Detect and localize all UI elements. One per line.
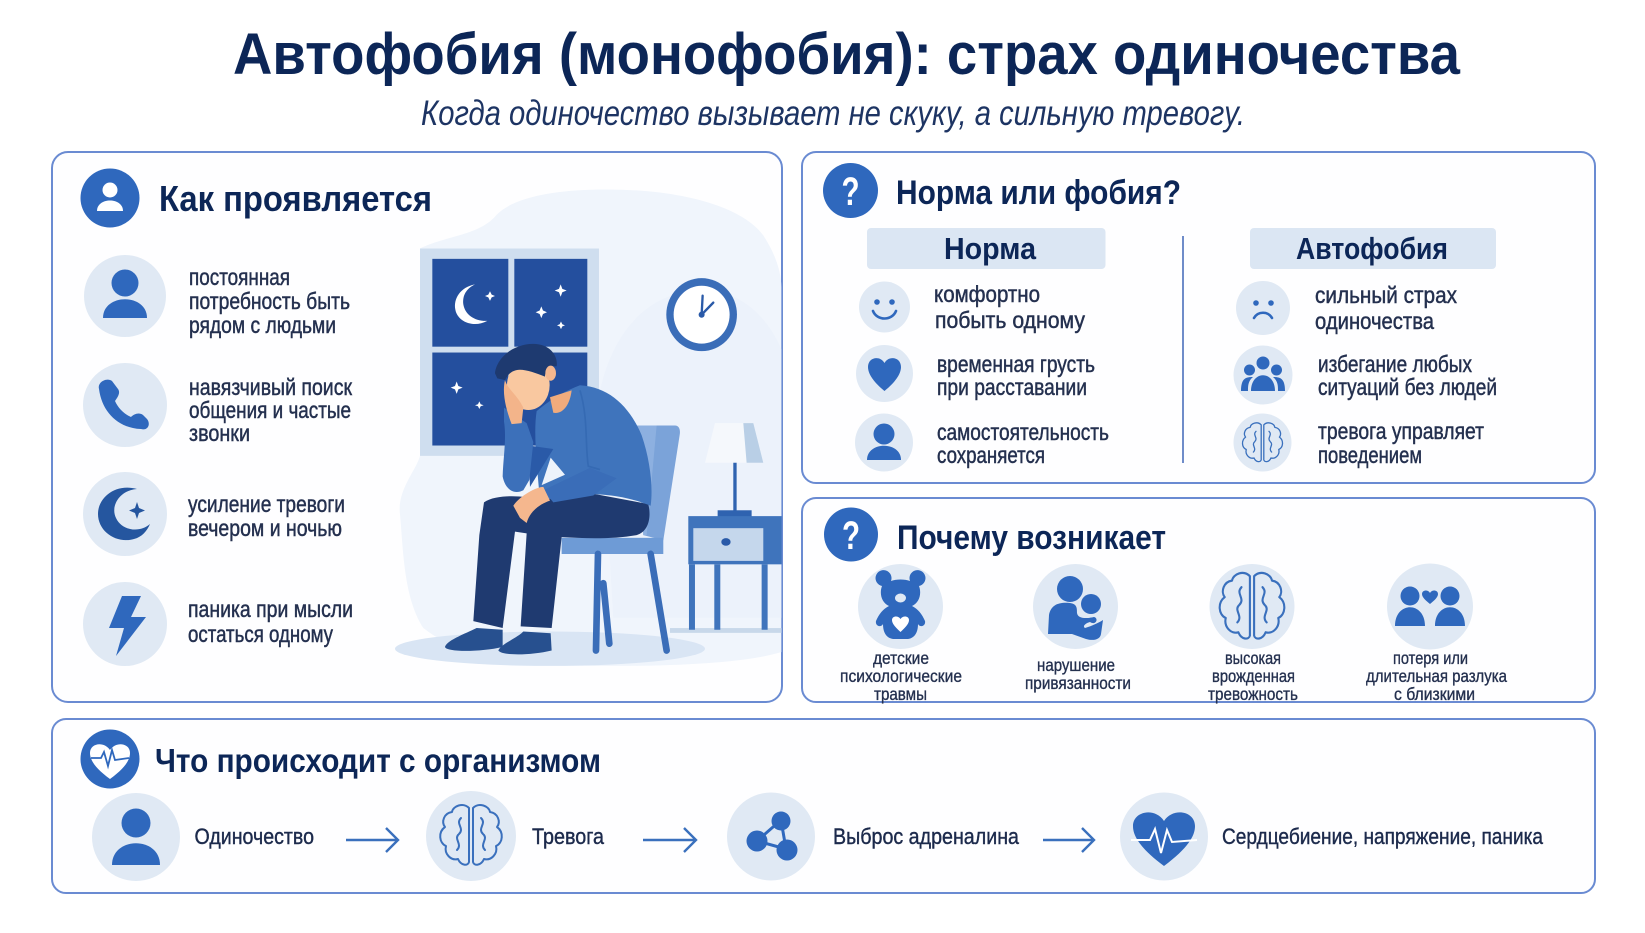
norm: independence: сохраняется <box>937 442 1045 468</box>
symptom: constant need: рядом с людьми <box>189 312 336 338</box>
cause: loss or separation <box>1366 564 1507 704</box>
icon: question: ? <box>842 170 860 214</box>
panel: norm or phobia <box>802 152 1595 483</box>
phobia: strong fear: одиночества <box>1315 308 1434 334</box>
column header: autophobia <box>1250 228 1496 269</box>
heading: why it arises: Почему возникает <box>897 519 1166 557</box>
phobia: avoidance: избегание любых <box>1318 351 1472 377</box>
panel: what happens to the body <box>52 719 1595 893</box>
cause: attachment disorder: нарушение <box>1037 655 1115 675</box>
icon: section person <box>80 168 140 228</box>
arrow <box>1043 828 1094 852</box>
cause: innate anxiety <box>1208 564 1298 704</box>
symptom: panic: остаться одному <box>188 621 333 647</box>
illustration: lonely man at night <box>395 190 782 666</box>
arrow <box>643 828 696 852</box>
step: loneliness <box>92 793 314 881</box>
step: adrenaline release <box>727 792 1019 880</box>
cause: attachment disorder <box>1025 564 1131 693</box>
phobia: strong fear: сильный страх <box>1315 282 1457 308</box>
symptom: calls: навязчивый поиск <box>189 374 353 400</box>
cause: childhood trauma <box>840 564 962 704</box>
cause: loss or separation: длительная разлука <box>1366 666 1507 686</box>
cause: innate anxiety: высокая <box>1225 648 1281 668</box>
norm: comfortable alone: побыть одному <box>935 307 1085 333</box>
cause: innate anxiety: врожденная <box>1212 666 1295 686</box>
norm: comfortable alone: комфортно <box>934 281 1040 307</box>
symptom: evening anxiety: вечером и ночью <box>188 515 342 541</box>
symptom: panic: паника при мысли <box>188 596 353 622</box>
norm: temporary sadness <box>856 345 1095 402</box>
step: loneliness: Одиночество <box>194 824 314 849</box>
cause: attachment disorder: привязанности <box>1025 673 1131 693</box>
step: palpitations, tension, panic: Сердцебиение, напряжение, паника <box>1222 824 1543 849</box>
phobia: avoidance <box>1234 346 1497 404</box>
norm: temporary sadness: при расставании <box>937 374 1087 400</box>
column header: autophobia: Автофобия <box>1296 231 1448 266</box>
column header: norm: Норма <box>944 231 1037 266</box>
step: anxiety <box>426 791 604 881</box>
step: anxiety: Тревога <box>532 824 604 849</box>
symptom: calls: общения и частые <box>189 397 351 423</box>
symptom: calls: звонки <box>189 420 250 446</box>
symptom: evening anxiety <box>83 472 345 556</box>
cause: loss or separation: с близкими <box>1394 684 1475 704</box>
symptom: panic <box>83 582 353 666</box>
cause: loss or separation: потеря или <box>1393 648 1468 668</box>
norm: independence: самостоятельность <box>937 419 1109 445</box>
symptom: constant need: постоянная <box>189 264 290 290</box>
cause: childhood trauma: травмы <box>874 684 927 704</box>
symptom: evening anxiety: усиление тревоги <box>188 491 345 517</box>
norm: temporary sadness: временная грусть <box>937 351 1095 377</box>
subtitle: Когда одиночество вызывает не скуку, а сильную тревогу. <box>421 94 1245 133</box>
icon: question <box>824 508 878 562</box>
step: palpitations, tension, panic <box>1120 792 1543 880</box>
step: adrenaline release: Выброс адреналина <box>833 824 1019 849</box>
norm: comfortable alone <box>859 281 1085 333</box>
icon: question: ? <box>842 514 860 558</box>
heading: what happens to the body: Что происходит с организмом <box>155 742 601 779</box>
phobia: avoidance: ситуаций без людей <box>1318 374 1497 400</box>
panel: how it manifests <box>52 152 782 702</box>
icon: question <box>823 163 878 218</box>
phobia: anxiety controls behaviour: поведением <box>1318 442 1422 468</box>
phobia: strong fear <box>1236 281 1457 335</box>
cause: childhood trauma: психологические <box>840 666 962 686</box>
symptom: constant need: потребность быть <box>189 288 350 314</box>
symptom: calls <box>83 363 353 447</box>
panel: why it arises <box>802 498 1595 704</box>
heading: norm or phobia: Норма или фобия? <box>896 174 1181 212</box>
norm: independence <box>855 414 1109 472</box>
cause: childhood trauma: детские <box>873 648 929 668</box>
icon: heart pulse <box>80 730 140 788</box>
phobia: anxiety controls behaviour: тревога управляет <box>1318 418 1484 444</box>
symptom: constant need <box>84 255 350 338</box>
cause: innate anxiety: тревожность <box>1208 684 1298 704</box>
heading: how it manifests: Как проявляется <box>159 178 432 219</box>
column header: norm <box>867 228 1106 269</box>
title: Автофобия (монофобия): страх одиночества <box>233 22 1461 87</box>
arrow <box>346 828 398 852</box>
phobia: anxiety controls behaviour <box>1234 414 1484 472</box>
